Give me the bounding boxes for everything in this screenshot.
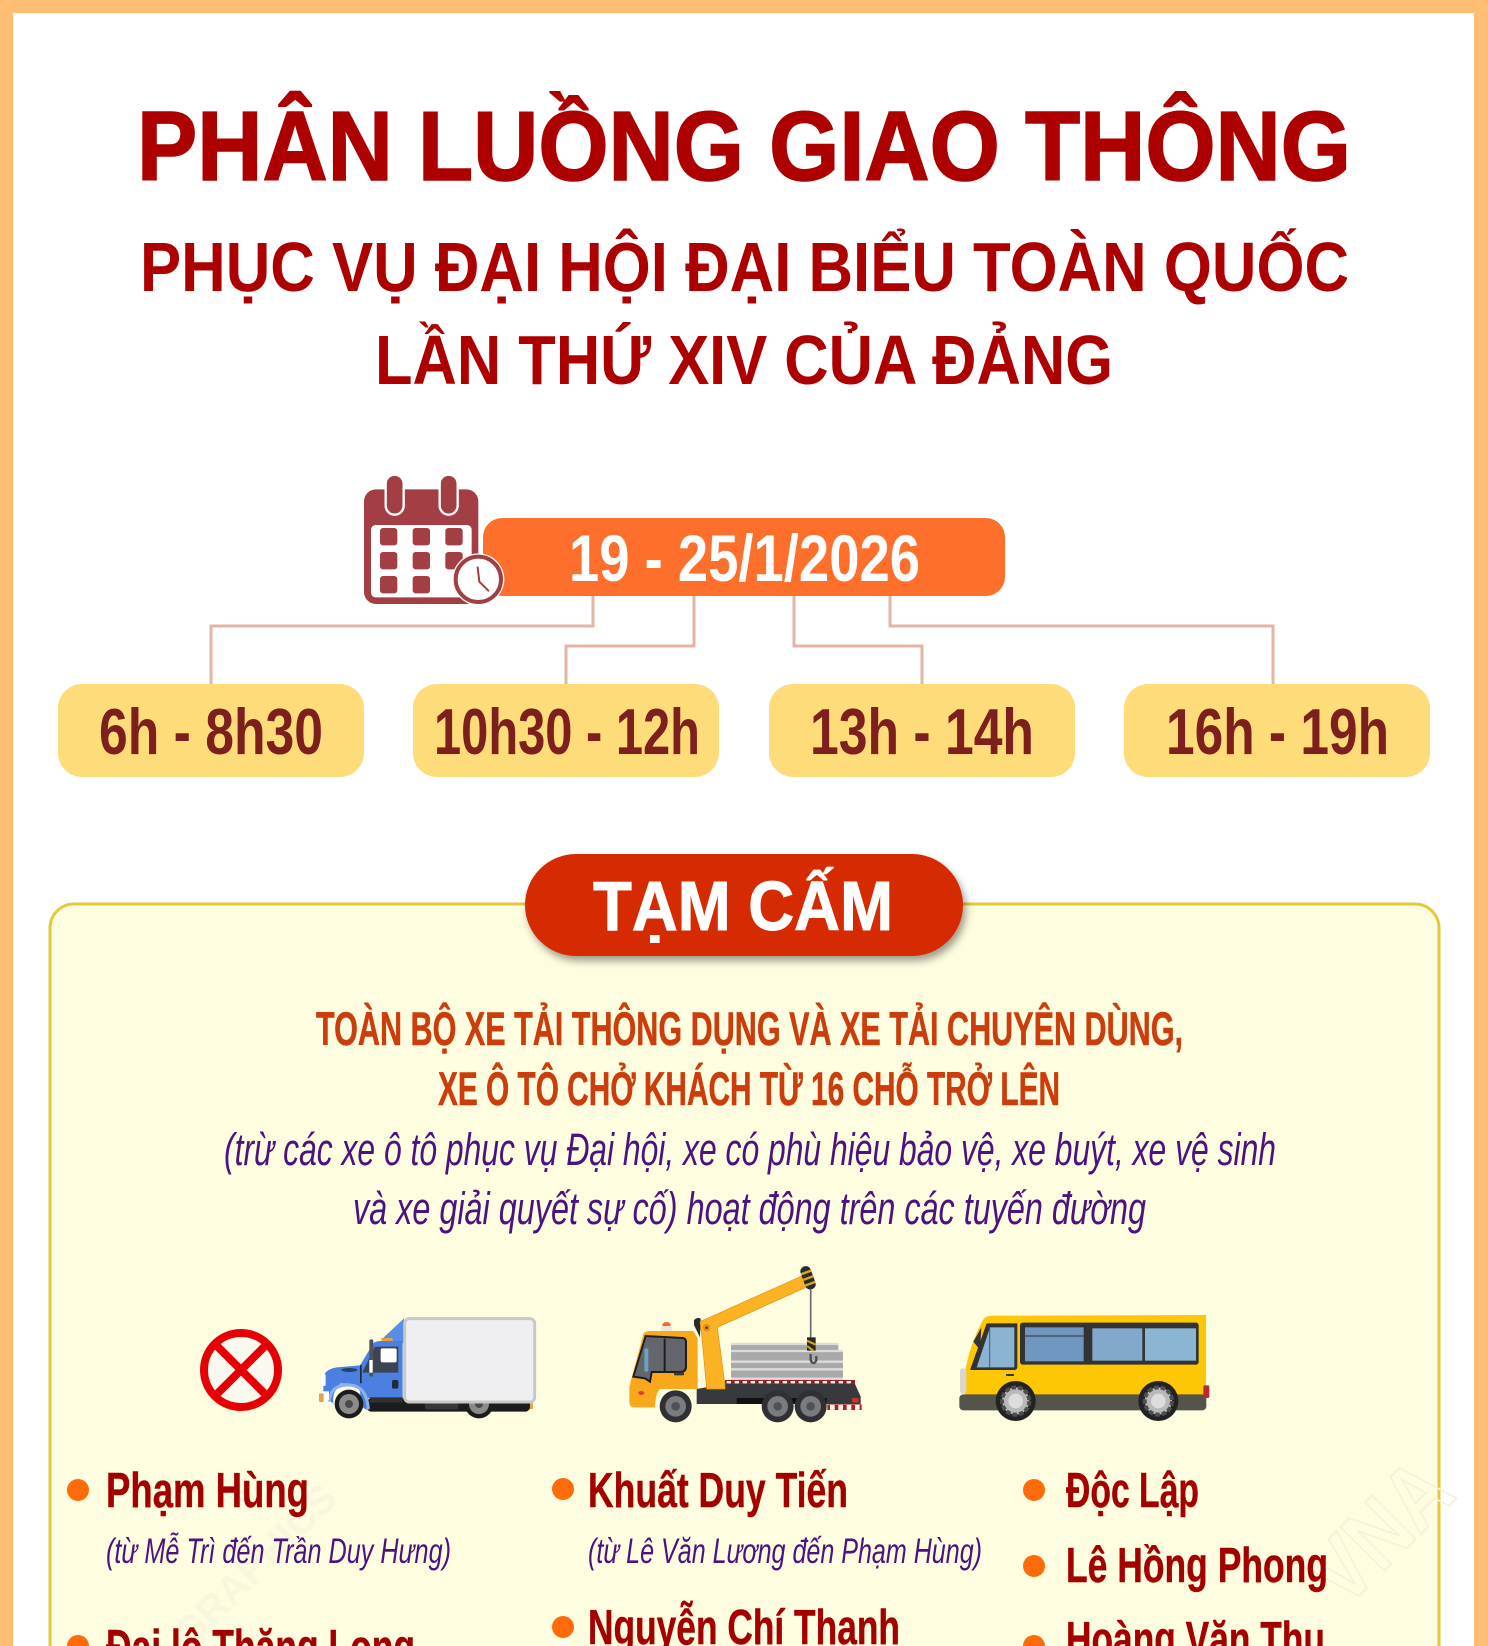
description line 4: và xe giải quyết sự cố) hoạt động trên các tuyến đường: [353, 1183, 1146, 1234]
description text block: [224, 1002, 1276, 1234]
panel: prohibited vehicles and routes: [50, 904, 1439, 1646]
title line 3: LẦN THỨ XIV CỦA ĐẢNG: [375, 320, 1113, 399]
route name: Độc Lập: [1066, 1464, 1199, 1518]
route name: Phạm Hùng: [106, 1464, 309, 1518]
date text: 19 - 25/1/2026: [569, 521, 920, 595]
time slot 2: [413, 684, 719, 777]
bullet: [552, 1478, 574, 1500]
bullet: [1023, 1635, 1045, 1646]
route detail: (từ Lê Văn Lương đến Phạm Hùng): [588, 1532, 982, 1571]
time slot 2: 10h30 - 12h: [434, 695, 700, 768]
date banner: [483, 518, 1005, 596]
route list: column 3: [1023, 1464, 1328, 1646]
heading pill: TẠM CẤM: TẠM CẤM: [593, 867, 893, 945]
route list: column 2: [552, 1464, 982, 1646]
bullet: [67, 1635, 89, 1646]
bullet: [552, 1616, 574, 1638]
time slot 1: [58, 684, 364, 777]
route detail: (từ Mễ Trì đến Trần Duy Hưng): [106, 1532, 451, 1571]
time slots: [58, 684, 1430, 777]
title line 2: PHỤC VỤ ĐẠI HỘI ĐẠI BIỂU TOÀN QUỐC: [140, 227, 1349, 306]
title line 1: PHÂN LUỒNG GIAO THÔNG: [137, 91, 1351, 201]
icon: calendar with clock: [364, 475, 504, 605]
time slot 3: [769, 684, 1075, 777]
connector lines from date to time slots: [211, 596, 1273, 685]
icon: yellow bus: [959, 1315, 1209, 1421]
time slot 3: 13h - 14h: [810, 695, 1034, 768]
bullet: [1023, 1555, 1045, 1577]
title: [137, 91, 1351, 399]
time slot 4: [1124, 684, 1430, 777]
route name: Lê Hồng Phong: [1066, 1539, 1328, 1593]
bullet: [67, 1479, 89, 1501]
heading pill: TẠM CẤM: [525, 854, 963, 956]
bullet: [1023, 1479, 1045, 1501]
icon: prohibition sign: [204, 1333, 278, 1407]
route name: Khuất Duy Tiến: [588, 1464, 848, 1518]
time slot 1: 6h - 8h30: [99, 695, 323, 768]
route list: column 1: [67, 1464, 451, 1646]
description line 2: XE Ô TÔ CHỞ KHÁCH TỪ 16 CHỖ TRỞ LÊN: [438, 1062, 1060, 1115]
watermark: VNA: [1288, 1440, 1472, 1624]
icon: box truck: [319, 1318, 535, 1418]
icon: crane truck: [629, 1265, 862, 1422]
time slot 4: 16h - 19h: [1166, 695, 1389, 768]
